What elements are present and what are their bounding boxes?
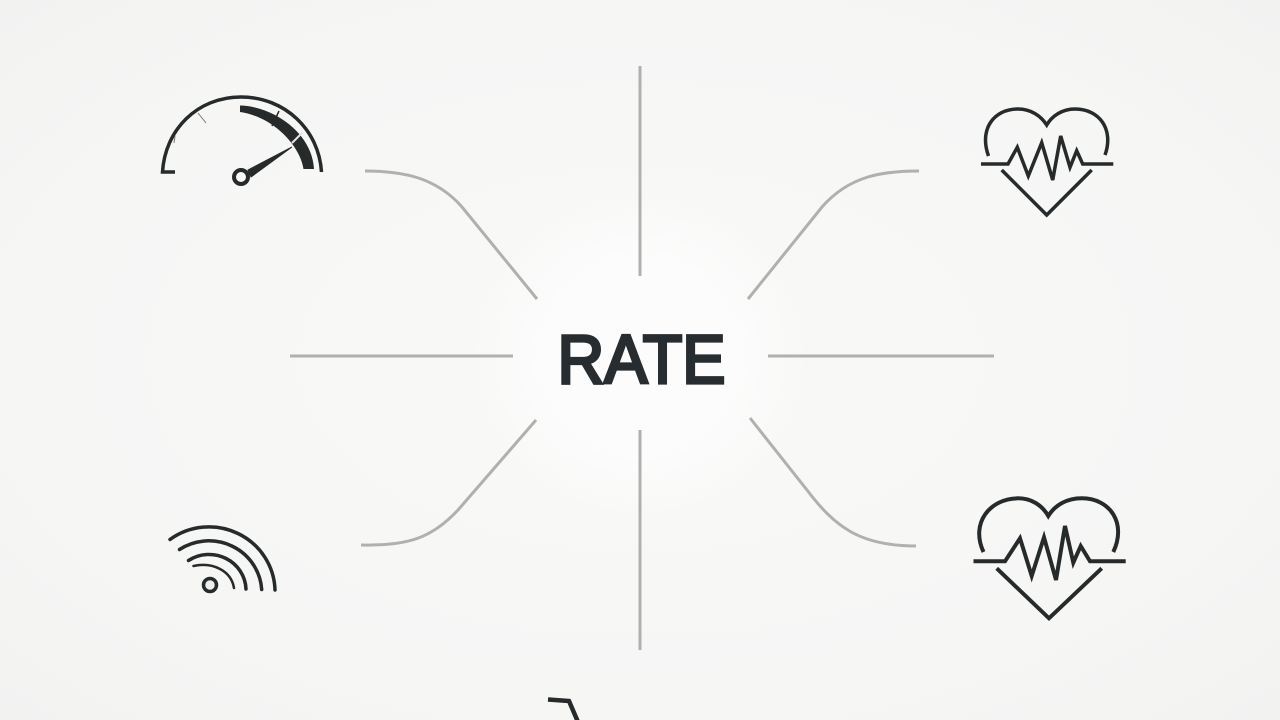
heart bottom point xyxy=(1002,170,1092,215)
gauge tick marks xyxy=(174,113,206,143)
line: left horizontal xyxy=(290,354,513,358)
icon: heart with pulse, bottom right xyxy=(974,498,1126,618)
heart top lobes xyxy=(986,109,1108,156)
connector: top right curve xyxy=(748,171,919,299)
signal source ring xyxy=(204,578,216,592)
connector lines xyxy=(290,66,994,650)
icon: cropped fragment at bottom edge xyxy=(548,700,578,720)
icon: signal waves xyxy=(170,527,275,592)
pulse line xyxy=(981,136,1113,180)
gauge hub xyxy=(234,170,248,184)
line: right horizontal xyxy=(768,354,994,358)
gauge outer arc xyxy=(162,97,322,172)
gauge band tick xyxy=(272,111,279,126)
gauge needle xyxy=(248,147,292,177)
connector: top left curve xyxy=(365,171,537,299)
pulse line xyxy=(974,526,1126,580)
gauge band gaps xyxy=(292,133,302,143)
line: bottom vertical xyxy=(638,430,642,650)
signal arcs xyxy=(170,527,275,590)
connector: bottom right curve xyxy=(750,418,916,546)
heart top lobes xyxy=(979,498,1118,552)
icon: heart with pulse, top right xyxy=(981,109,1113,215)
heart bottom point xyxy=(997,568,1102,618)
connector: bottom left curve xyxy=(361,420,536,545)
title: RATE: RATE xyxy=(558,321,726,398)
line: top vertical xyxy=(638,66,642,276)
icon: speedometer gauge xyxy=(162,97,322,184)
gauge tapered dark band xyxy=(240,106,314,169)
